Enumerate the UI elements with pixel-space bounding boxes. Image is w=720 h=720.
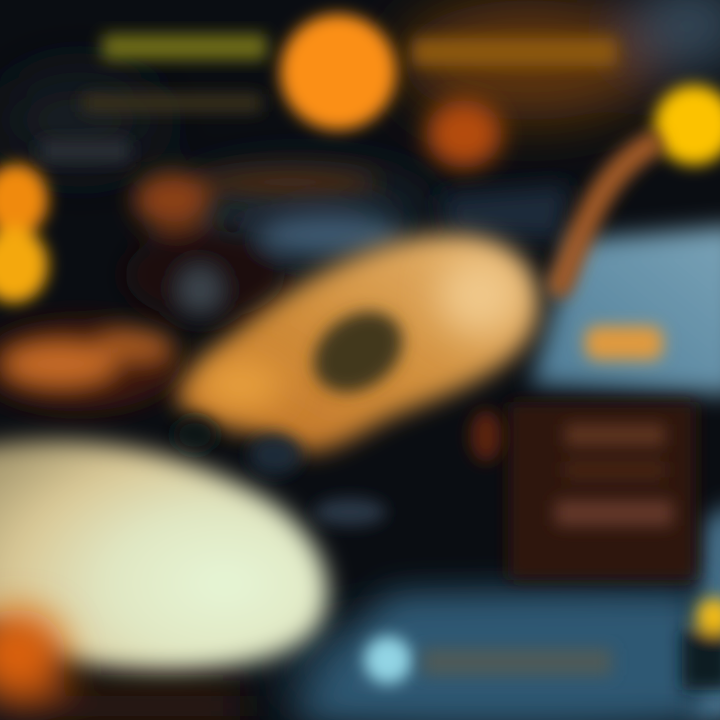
icon: left orange and yellow discs bbox=[0, 164, 48, 303]
heading: blurred title right bbox=[412, 38, 617, 66]
illustration: pale green egg bbox=[0, 440, 328, 672]
panel: dark brown table bbox=[508, 402, 696, 580]
table rows bbox=[470, 410, 673, 526]
loaf highlight bbox=[195, 255, 522, 411]
icon: dark olive shape on loaf bbox=[298, 295, 418, 409]
callout: orange pill on blue panel bbox=[585, 326, 663, 360]
dark oval with blurred marks bbox=[125, 168, 400, 320]
progress bar: bottom bbox=[422, 648, 612, 676]
dark dots under loaf bbox=[173, 417, 386, 526]
icon: bottom right yellow disc bbox=[682, 598, 720, 690]
left orange plate bbox=[0, 319, 180, 411]
arrow: curved brown ribbon bbox=[560, 145, 650, 285]
icon: yellow circle top right bbox=[654, 85, 720, 165]
panel: bottom blue panel bbox=[290, 590, 700, 720]
icon: small orange circle bbox=[426, 100, 502, 168]
orange corner glow bbox=[0, 609, 240, 720]
icon: light blue dot bbox=[364, 636, 412, 684]
illustration: golden loaf bbox=[175, 235, 537, 451]
icon: large orange circle bbox=[280, 14, 396, 130]
heading: blurred title left bbox=[102, 34, 267, 60]
subtitle: blurred text bbox=[40, 94, 262, 162]
panel: right blue slanted panel bbox=[440, 185, 720, 720]
